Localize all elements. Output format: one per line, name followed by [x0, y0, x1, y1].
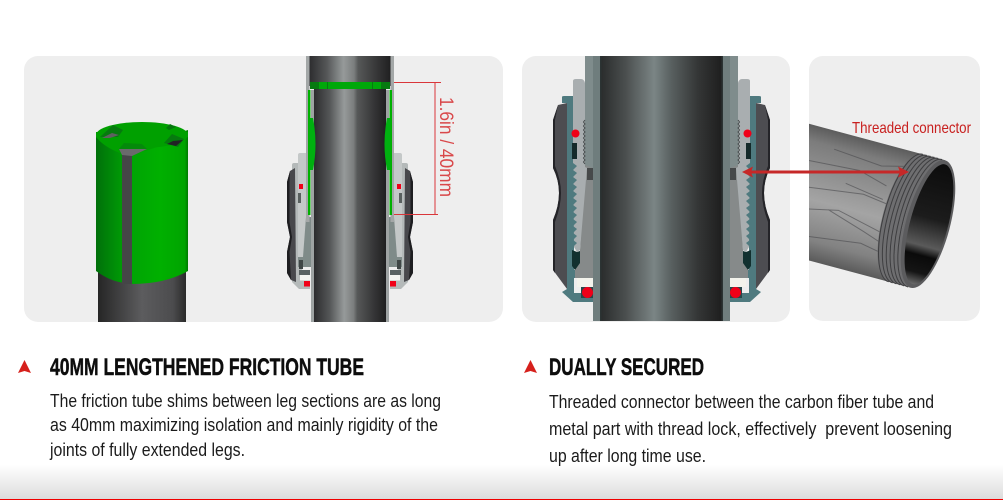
panel: friction tube illustrations — [24, 56, 503, 325]
dimension: 40mm shim length: 1.6in / 40mm — [435, 97, 456, 197]
text: friction tube description: The friction tube shims between leg sections are as long — [50, 391, 441, 411]
text: dually secured description: metal part with thread lock, effectively prevent loosening — [549, 419, 952, 439]
arrow: links joint thread to tube thread — [742, 166, 909, 178]
text: friction tube description — [49, 391, 441, 460]
heading: friction tube: 40MM LENGTHENED FRICTION TUBE — [50, 354, 364, 381]
icon: red arrowhead — [524, 360, 537, 373]
text: dually secured description — [549, 392, 952, 466]
illustration: leg joint cross-section — [287, 56, 413, 322]
illustration: green friction shim on tube — [96, 122, 188, 325]
dimension: 40mm shim length — [394, 82, 456, 214]
text: friction tube description: as 40mm maximizing isolation and mainly rigidity of the — [50, 415, 438, 435]
section: 40mm lengthened friction tube — [18, 354, 441, 460]
panel: carbon tube with threaded connector — [809, 56, 980, 321]
bottom fade band — [0, 465, 1003, 500]
illustration: carbon fiber tube — [809, 124, 956, 288]
heading: dually secured: DUALLY SECURED — [549, 354, 704, 381]
section: dually secured — [524, 354, 952, 466]
panel: threaded joint cross-section — [522, 56, 790, 322]
label: threaded connector: Threaded connector — [852, 120, 972, 137]
text: dually secured description: up after long time use. — [549, 446, 706, 466]
text: friction tube description: joints of fully extended legs. — [49, 440, 245, 460]
icon: red arrowhead — [18, 360, 31, 373]
text: dually secured description: Threaded connector between the carbon fiber tube and — [549, 392, 934, 412]
